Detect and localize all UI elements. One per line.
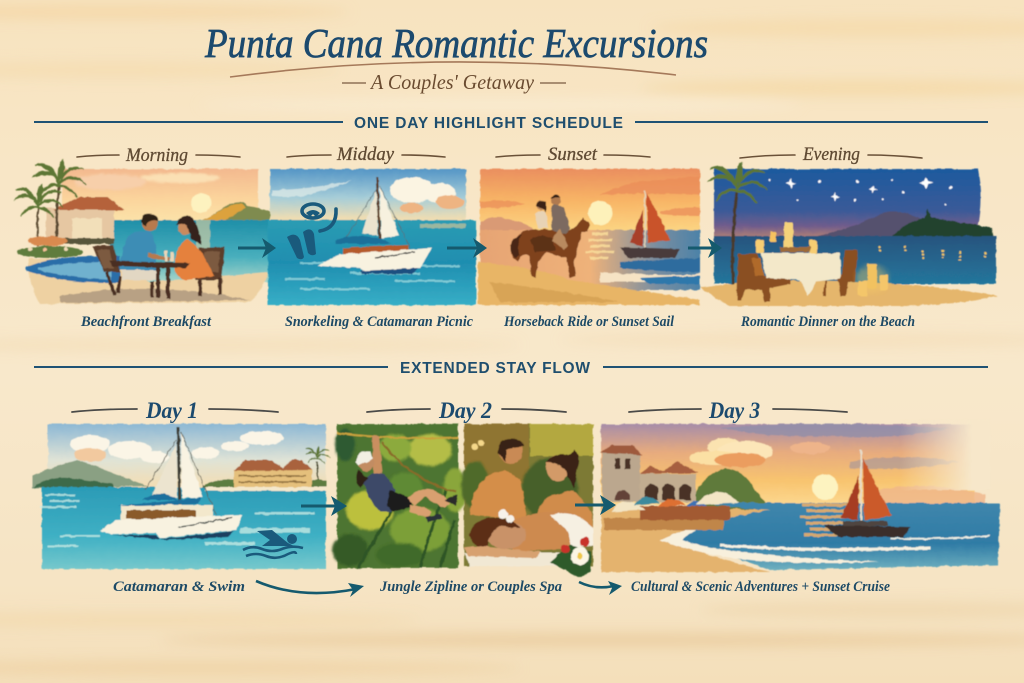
caption: beachfront breakfast: Beachfront Breakfast [80,314,212,330]
title: Punta Cana Romantic Excursions [204,20,708,66]
man [470,439,528,520]
sky [601,424,975,505]
dinner table [737,222,858,302]
mountains [32,460,148,488]
mountain [810,211,960,238]
sea [660,503,1000,570]
time label: morning: Morning [125,145,188,166]
flower arrangement [550,537,592,577]
horses and riders [511,195,590,278]
title swoosh [230,62,676,77]
day label: day 3: Day 3 [708,398,760,423]
curved arrow to day 2 caption [256,581,364,597]
clouds [390,177,464,213]
scene: catamaran and swim [32,424,330,569]
day label: day 1 [72,398,278,423]
sand [700,281,998,306]
flow arrow: midday to sunset [447,238,487,258]
zipline rider [356,436,458,522]
scene: jungle zipline [332,424,467,568]
trees [692,468,768,512]
icon: swimmer [243,530,303,558]
scene: horseback ride at sunset [478,169,700,305]
island [203,202,296,220]
sea [42,487,326,569]
scene: beachfront breakfast [15,160,296,304]
flower hedge [17,236,83,258]
day label: day 2: Day 2 [438,398,492,423]
couple at table [93,214,225,299]
sailboat [824,450,911,537]
curved arrow to day 3 caption [579,581,622,595]
sky [480,169,700,233]
sun [812,474,838,500]
scene: romantic dinner [700,162,998,306]
palm [732,192,737,284]
sun [588,201,612,225]
flow arrow: day 1 to day 2 [301,496,347,516]
stars [769,177,952,206]
caption: horseback ride or sunset sail: Horseback Ride or Sunset Sail [503,314,675,330]
sand [28,258,268,304]
flow arrow: day 2 to day 3 [575,495,616,515]
woman seated [537,450,593,530]
catamaran [100,427,243,540]
sun [191,193,211,213]
icon: snorkel mask [302,204,336,231]
sea [480,230,700,290]
day label: day 2 [367,398,566,423]
beach and surf [601,505,770,572]
sky [62,169,258,223]
church [600,445,698,502]
massage table [464,553,580,566]
island [888,209,994,241]
caption: catamaran and swim: Catamaran & Swim [113,579,245,595]
scene: couples spa [461,424,593,577]
scene: cultural adventures and sunset cruise [600,420,1000,572]
subtitle: A Couples' Getaway [369,70,535,94]
sky [48,424,326,489]
woman lying down [464,509,593,558]
flow arrow: sunset to evening [688,238,722,258]
time label: evening [740,144,922,165]
beach [478,262,700,305]
sailboat [620,190,680,258]
caption: snorkeling and catamaran picnic: Snorkeling & Catamaran Picnic [285,314,473,330]
day label: day 3 [629,398,847,423]
scene: snorkeling and catamaran [268,169,476,305]
lanterns [856,264,888,296]
pavilion [46,197,124,244]
day label: day 1: Day 1 [145,398,198,423]
pool [25,256,120,283]
section heading: one day highlight schedule: ONE DAY HIGHLIGHT SCHEDULE [354,115,623,132]
time label: midday: Midday [336,144,395,165]
icon: swim fins [287,229,316,259]
sea [110,220,274,282]
sea [268,220,476,305]
spa background [464,424,593,566]
night sky [714,169,981,236]
clouds [689,438,830,467]
caption: romantic dinner on the beach: Romantic Dinner on the Beach [740,314,915,330]
clouds [70,431,284,463]
resort [203,446,330,488]
caption: cultural and scenic adventures plus sunset cruise: Cultural & Scenic Adventures + Sunset Cruise [631,579,890,595]
catamaran [317,177,432,274]
time label: evening: Evening [802,144,860,165]
palm trees [15,160,86,246]
caption: jungle zipline or couples spa: Jungle Zipline or Couples Spa [379,579,562,595]
time label: sunset: Sunset [548,144,598,165]
market stalls and umbrellas [604,492,739,530]
section heading: extended stay flow: EXTENDED STAY FLOW [400,360,590,377]
sea [714,236,996,284]
flow arrow: morning to midday [238,238,276,258]
sky [270,169,466,221]
jungle background [337,424,458,568]
zipline cable [337,433,458,438]
